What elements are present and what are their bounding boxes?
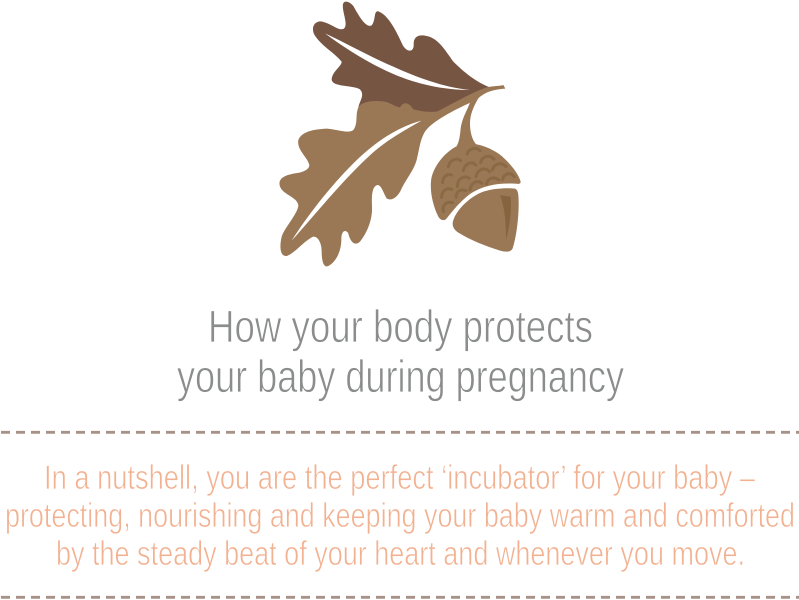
acorn stem xyxy=(457,98,478,147)
acorn nut xyxy=(453,188,519,252)
heading xyxy=(177,301,624,402)
icon: oak leaves and acorn xyxy=(279,2,521,266)
body text block xyxy=(5,459,795,573)
heading line 2: your baby during pregnancy xyxy=(177,351,624,402)
light oak leaf with stem xyxy=(279,85,505,266)
acorn cap xyxy=(431,143,521,220)
heading line 1: How your body protects xyxy=(208,301,593,352)
dark oak leaf xyxy=(313,2,490,113)
